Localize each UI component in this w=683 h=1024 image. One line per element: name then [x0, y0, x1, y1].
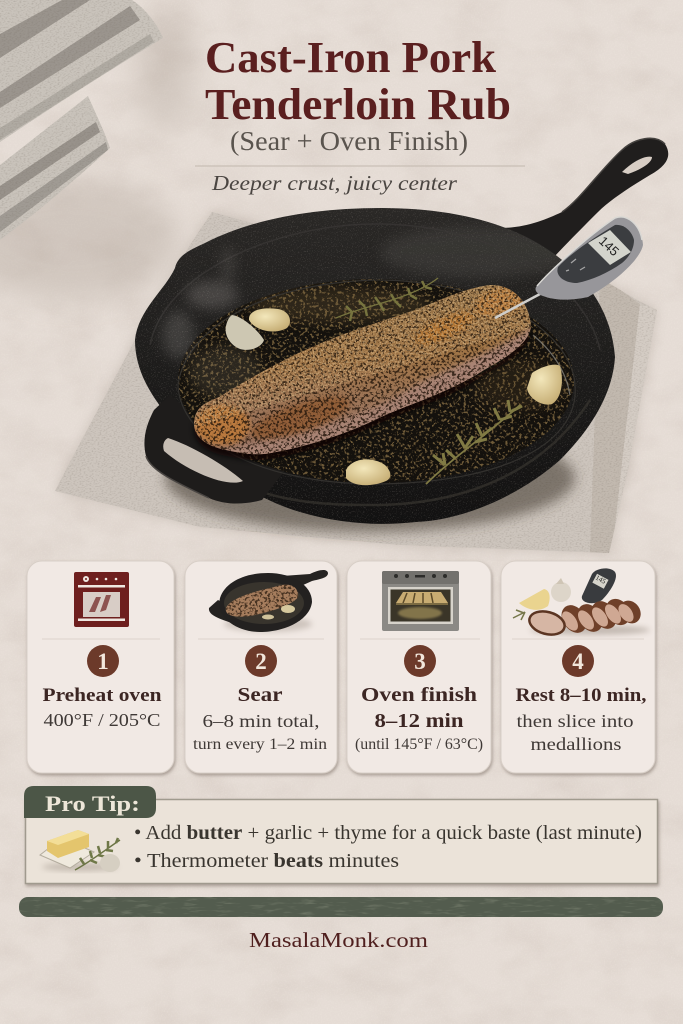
pro tip label: [24, 786, 156, 818]
icon: butter, herb and garlic: [40, 830, 120, 872]
striped kitchen towel, top-left: [0, 0, 170, 245]
pro tip label: Pro Tip:: [45, 791, 140, 816]
title: Cast-Iron Pork: [205, 33, 497, 82]
decorative green bar: [19, 897, 663, 917]
step card 2: sear: [185, 561, 337, 773]
icon: mini skillet: [209, 570, 328, 632]
panel: pro tip: [24, 786, 658, 884]
meat thermometer: 145: [596, 233, 622, 259]
title: Tenderloin Rub: [205, 80, 511, 129]
thyme sprig lower: [426, 400, 522, 484]
skillet helper handle: [144, 395, 285, 504]
step 1 text: 400°F / 205°C: [44, 710, 160, 730]
step 2 text: 6–8 min total,: [202, 711, 320, 731]
step number 1: [87, 645, 119, 677]
step number 3: [404, 645, 436, 677]
seasoned oil pool: [170, 275, 585, 490]
step 1 text: Preheat oven: [42, 685, 162, 706]
subtitle: (Sear + Oven Finish): [230, 126, 468, 156]
step 2 text: turn every 1–2 min: [193, 736, 327, 753]
title: [205, 33, 511, 129]
step 3 text: (until 145°F / 63°C): [355, 736, 483, 753]
tagline: Deeper crust, juicy center: [211, 171, 458, 195]
step 4 text: Rest 8–10 min,: [516, 685, 647, 706]
step 3 text: Oven finish: [361, 684, 477, 706]
step 3 text: 8–12 min: [374, 710, 464, 732]
step 4 text: medallions: [530, 734, 622, 754]
step 4 text: [516, 685, 647, 754]
skillet long handle: [500, 138, 668, 258]
step number 1: 1: [97, 649, 109, 674]
garlic cloves: [226, 308, 562, 485]
step number 4: 4: [572, 649, 584, 674]
step card 3: oven finish: [347, 561, 491, 773]
step 3 text: [355, 684, 483, 753]
pork tenderloin: [192, 285, 534, 464]
pro tip bullets: • Add butter + garlic + thyme for a quick baste (last minute): [134, 822, 642, 844]
thermometer face: [557, 225, 634, 283]
step 2 text: [193, 684, 327, 753]
step number 2: [245, 645, 277, 677]
step card 4: rest and slice: [501, 561, 655, 773]
meat thermometer: [495, 217, 643, 318]
step number 2: 2: [255, 649, 267, 674]
icon: sliced pork, butter, garlic, thermometer: 145: [594, 574, 608, 586]
pro tip bullets: • Thermometer beats minutes: [134, 850, 399, 872]
steam: [162, 247, 238, 359]
oil glint beside pork: [533, 335, 570, 395]
skillet iron texture and inner wall: [130, 205, 620, 527]
cast-iron skillet: [130, 138, 668, 532]
step 2 text: Sear: [238, 684, 283, 706]
icon: oven: [74, 572, 129, 627]
step number 4: [562, 645, 594, 677]
linen napkin under skillet: [50, 205, 662, 557]
step card 1: preheat oven: [27, 561, 174, 773]
skillet body: [135, 208, 615, 524]
step 4 text: then slice into: [516, 711, 634, 731]
skillet shadow: [165, 424, 575, 532]
icon: sliced pork, butter, garlic, thermometer: [513, 568, 650, 638]
step number 3: 3: [414, 649, 426, 674]
icon: oven with tray: [382, 571, 459, 631]
website credit: MasalaMonk.com: [249, 928, 428, 952]
thyme sprig upper: [336, 278, 438, 321]
thermometer display: [588, 230, 631, 265]
step 1 text: [42, 685, 162, 730]
pro tip bullets: [134, 822, 642, 872]
